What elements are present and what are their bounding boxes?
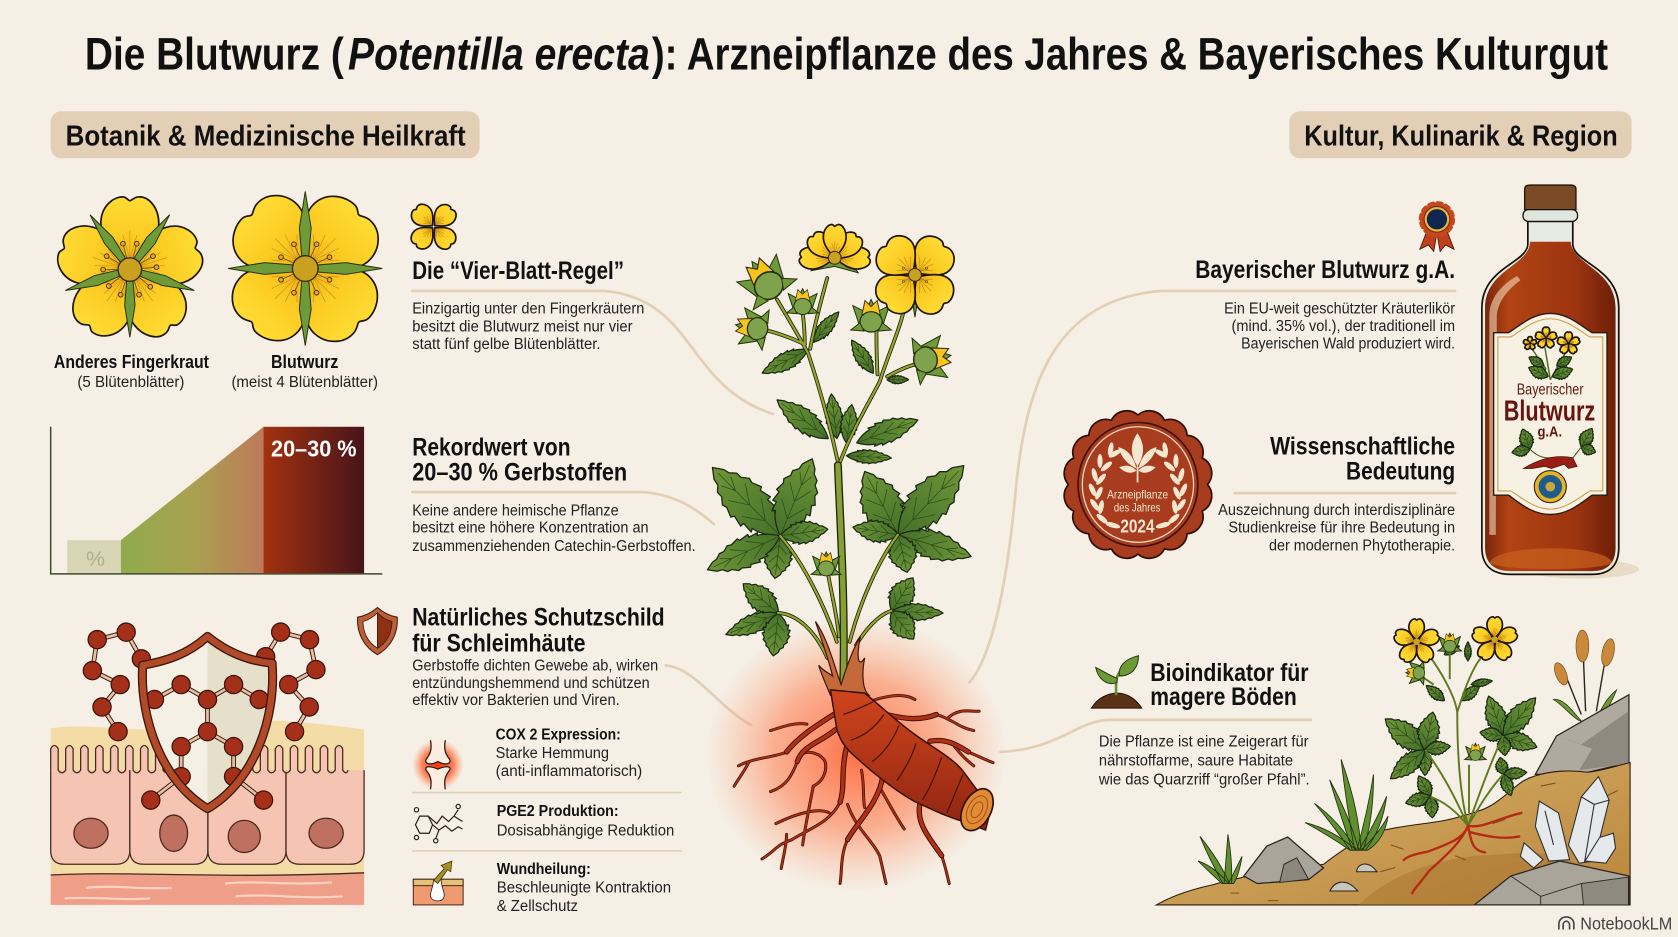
- logo: NotebookLM: NotebookLM: [1580, 915, 1672, 934]
- label: Anderes Fingerkraut: Anderes Fingerkraut: [54, 352, 209, 372]
- title: Potentilla erecta: [348, 29, 650, 80]
- laurel: [1087, 442, 1189, 530]
- text block: Schutzschild: entzündungshemmend und schützen: [412, 674, 650, 692]
- leaves: [697, 307, 979, 658]
- buds: [730, 246, 955, 576]
- title: Die Blutwurz (: [85, 29, 344, 80]
- section pill: Botanik: [51, 111, 480, 158]
- text block: Rekordwert: Keine andere heimische Pflanze: [412, 502, 619, 520]
- text: COX 2: Starke Hemmung: [496, 744, 609, 762]
- bottle: g.A.: [1537, 423, 1562, 440]
- text block: Schutzschild: für Schleimhäute: [412, 630, 585, 657]
- text block: Bioindikator: magere Böden: [1150, 684, 1297, 711]
- label: Anderes Fingerkraut: (5 Blütenblätter): [77, 373, 184, 391]
- text block: Rekordwert: [412, 435, 696, 555]
- bottle: Bayerischer: [1517, 381, 1584, 399]
- text block: Wissenschaftliche Bedeutung: Bedeutung: [1346, 459, 1455, 486]
- text: PGE2: PGE2 Produktion:: [497, 802, 619, 820]
- text block: Wissenschaftliche Bedeutung: Auszeichnung durch interdisziplinäre: [1218, 501, 1455, 519]
- text block: Bayerischer Blutwurz: [1195, 257, 1456, 353]
- middle rock: [1244, 837, 1324, 884]
- grass tufts: [1198, 759, 1388, 884]
- text: PGE2: [497, 802, 674, 839]
- text block: Bioindikator: [1098, 660, 1310, 789]
- seal: Arzneipflanze des Jahres 2024: [1064, 411, 1212, 558]
- text: PGE2: Dosisabhängige Reduktion: [497, 821, 674, 839]
- stems: [762, 278, 918, 685]
- wheat: [1552, 630, 1617, 727]
- small plant roots: [1404, 813, 1521, 893]
- label plant: [1523, 327, 1581, 382]
- text block: Vier-Blatt-Regel: Einzigartig unter den Fingerkräutern: [412, 299, 644, 317]
- chart: tannin concentration: [51, 427, 382, 574]
- sprig: [1118, 433, 1157, 482]
- text block: Bioindikator: Die Pflanze ist eine Zeigerart für: [1099, 733, 1309, 751]
- flower comparison: four petals: [221, 184, 390, 391]
- illustration: mucosa with shield: [51, 623, 364, 905]
- cut root end: [954, 783, 1000, 836]
- text block: Wissenschaftliche Bedeutung: Wissenschaftliche: [1270, 434, 1455, 461]
- text: Wundheilung: & Zellschutz: [497, 897, 578, 915]
- text block: Vier-Blatt-Regel: besitzt die Blutwurz meist nur vier: [412, 318, 633, 336]
- bottle: Blutwurz: [1504, 395, 1595, 427]
- text: Wundheilung: [497, 860, 671, 915]
- taproot: [830, 690, 991, 830]
- seal: Arzneipflanze des Jahres 2024: des Jahres: [1114, 501, 1161, 514]
- label: [1494, 313, 1607, 514]
- text block: Rekordwert: Rekordwert von: [412, 435, 571, 462]
- central plant illustration: [697, 225, 1006, 891]
- icon: small shield: [358, 608, 397, 655]
- seal: Arzneipflanze des Jahres 2024: 2024: [1120, 517, 1155, 537]
- icon: PGE2 molecule: [414, 804, 462, 843]
- chart: tannin concentration: %: [86, 547, 105, 571]
- text block: Wissenschaftliche Bedeutung: [1218, 434, 1455, 554]
- text block: Bayerischer Blutwurz: Bayerischen Wald produziert wird.: [1241, 335, 1455, 353]
- soil: [1156, 763, 1630, 905]
- shield frame: [142, 636, 273, 809]
- label: Blutwurz: Blutwurz: [271, 352, 338, 372]
- text block: Bayerischer Blutwurz: Bayerischer Blutwurz g.A.: [1195, 257, 1455, 284]
- text block: Bioindikator: Bioindikator für: [1150, 660, 1309, 687]
- icon: four-petal flower: [221, 184, 390, 353]
- label: Blutwurz: [231, 352, 378, 391]
- text: Wundheilung: Wundheilung:: [497, 860, 591, 878]
- text block: Vier-Blatt-Regel: Die “Vier-Blatt-Regel”: [412, 258, 624, 285]
- text block: Rekordwert: besitzt eine höhere Konzentration an: [412, 519, 649, 537]
- title: [85, 29, 1608, 80]
- text block: Bioindikator: wie das Quarzriff “großer Pfahl”.: [1098, 771, 1310, 789]
- text block: Rekordwert: 20–30 % Gerbstoffen: [412, 459, 627, 486]
- text block: Bayerischer Blutwurz: (mind. 35% vol.), der traditionell im: [1232, 317, 1455, 335]
- flower comparison: five petals: [52, 197, 209, 391]
- text: COX 2: COX 2 Expression:: [496, 726, 621, 744]
- icon: five-petal flower: [52, 197, 208, 345]
- label root and leaves: [1511, 425, 1598, 468]
- icon: medal: [1420, 203, 1454, 251]
- text block: Schutzschild: effektiv vor Bakterien und Viren.: [412, 691, 620, 709]
- tissue layers: [51, 720, 364, 905]
- label: Blutwurz: (meist 4 Blütenblätter): [231, 373, 378, 391]
- lower rock: [1474, 861, 1629, 905]
- root glow: [706, 617, 1006, 891]
- icon: sprout: [1091, 656, 1142, 708]
- small plant: [1378, 617, 1544, 893]
- text block: Vier-Blatt-Regel: statt fünf gelbe Blütenblätter.: [412, 335, 600, 353]
- epithelial cells: [51, 746, 364, 864]
- section pill: Kultur: [1289, 111, 1632, 158]
- text block: Bayerischer Blutwurz: Ein EU-weit geschützter Kräuterlikör: [1224, 299, 1456, 317]
- section pill: Botanik: Botanik & Medizinische Heilkraft: [66, 120, 466, 152]
- label: Anderes Fingerkraut: [54, 352, 209, 391]
- text block: Wissenschaftliche Bedeutung: Studienkreise für ihre Bedeutung in: [1228, 519, 1455, 537]
- upper rock: [1535, 695, 1629, 774]
- text block: Schutzschild: Natürliches Schutzschild: [412, 605, 665, 632]
- text: COX 2: (anti-inflammatorisch): [496, 762, 642, 780]
- root sheath: [815, 621, 869, 695]
- side-view flower: [799, 225, 871, 273]
- connector lines: [412, 291, 1455, 752]
- text block: Rekordwert: zusammenziehenden Catechin-Gerbstoffen.: [412, 537, 696, 555]
- section pill: Kultur: Kultur, Kulinarik & Region: [1304, 120, 1618, 152]
- cap: [1525, 185, 1576, 210]
- glass body: [1482, 221, 1619, 574]
- seal: Arzneipflanze des Jahres 2024: Arzneipflanze: [1107, 488, 1169, 501]
- side roots: [734, 696, 993, 884]
- text block: Bioindikator: nährstoffarme, saure Habitate: [1099, 751, 1293, 769]
- landscape illustration: [1156, 617, 1630, 905]
- shield body: [141, 636, 274, 811]
- bottle: [1482, 185, 1639, 579]
- text block: Schutzschild: [412, 605, 665, 709]
- chart: tannin concentration: 20–30 %: [271, 436, 357, 462]
- geographic indication seal: [1534, 471, 1566, 503]
- icon: joint: [412, 739, 464, 790]
- quartz crystals: [1520, 777, 1616, 868]
- text: COX 2: [496, 726, 642, 780]
- icon: wound healing: [413, 861, 463, 905]
- pebbles: [1330, 864, 1377, 891]
- text block: Wissenschaftliche Bedeutung: der modernen Phytotherapie.: [1269, 536, 1455, 554]
- open flower: [870, 230, 960, 320]
- icon: clover: [408, 201, 459, 253]
- text block: Schutzschild: Gerbstoffe dichten Gewebe ab, wirken: [412, 657, 658, 675]
- molecules: [83, 623, 325, 809]
- text: Wundheilung: Beschleunigte Kontraktion: [497, 879, 671, 897]
- text block: Vier-Blatt-Regel: [412, 258, 644, 353]
